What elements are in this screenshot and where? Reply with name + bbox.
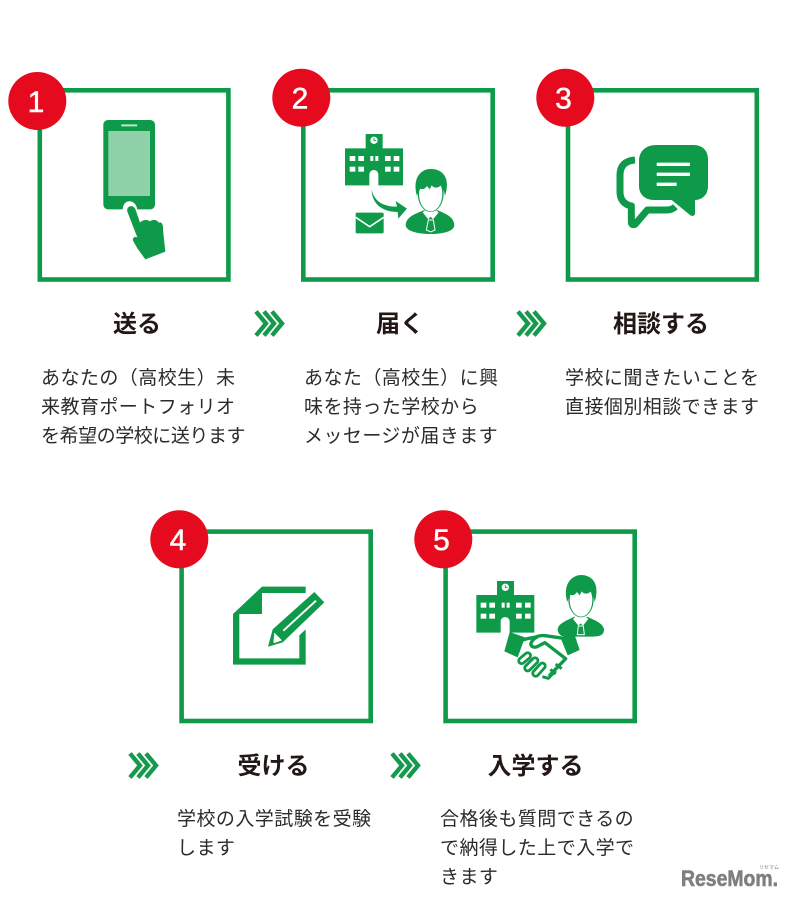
text: step 2 description: 味を持った学校から bbox=[304, 396, 479, 418]
student bbox=[558, 575, 604, 637]
number badge 2: 2 bbox=[292, 82, 308, 116]
frame 1 bbox=[40, 90, 228, 280]
icon: school, student and handshake bbox=[476, 575, 604, 678]
frame 3 bbox=[568, 90, 757, 280]
number badge 4 bbox=[150, 510, 208, 568]
heading: step 4: 受ける bbox=[238, 753, 310, 780]
logo: ReseMom watermark: リセマム bbox=[759, 865, 779, 871]
number badge 5: 5 bbox=[433, 524, 450, 557]
icon: document and pencil bbox=[233, 587, 324, 665]
icon: speech bubbles bbox=[620, 145, 708, 225]
text: step 4 description bbox=[177, 808, 372, 859]
panel: step 2 receive bbox=[272, 69, 493, 280]
frame 2 bbox=[303, 90, 493, 280]
heading: step 1: 送る bbox=[113, 311, 161, 338]
arrow: step 1 to 2 bbox=[256, 312, 282, 336]
text: step 1 description bbox=[41, 367, 245, 447]
text: step 3 description: 直接個別相談できます bbox=[565, 396, 760, 418]
panel: step 1 send bbox=[8, 72, 228, 280]
number badge 5 bbox=[414, 510, 472, 568]
student bbox=[406, 169, 454, 234]
heading: step 3: 相談する bbox=[613, 311, 709, 338]
text: step 1 description: 来教育ポートフォリオ bbox=[41, 396, 236, 418]
panel: step 5 enrol bbox=[414, 510, 635, 721]
text: step 5 description: で納得した上で入学で bbox=[440, 837, 635, 859]
icon: school, mail and student bbox=[345, 134, 454, 234]
icon: phone with tapping finger bbox=[103, 120, 165, 259]
text: step 1 description: を希望の学校に送ります bbox=[41, 425, 245, 447]
number badge 1 bbox=[8, 72, 66, 130]
heading: step 2: 届く bbox=[376, 311, 424, 338]
text: step 3 description bbox=[565, 367, 760, 418]
number badge 3: 3 bbox=[555, 82, 572, 116]
text: step 2 description bbox=[304, 367, 499, 447]
arrow: step 2 to 3 bbox=[518, 312, 544, 336]
frame 5 bbox=[446, 532, 635, 721]
panel: step 3 consult bbox=[536, 69, 757, 280]
text: step 5 description: きます bbox=[440, 867, 498, 888]
frame 4 bbox=[182, 532, 371, 721]
envelope bbox=[356, 213, 384, 233]
text: step 4 description: します bbox=[177, 838, 235, 859]
logo: ReseMom watermark: ReseMom. bbox=[681, 866, 778, 891]
handshake bbox=[504, 632, 580, 678]
text: step 5 description: 合格後も質問できるの bbox=[440, 808, 634, 830]
arrow: step 4 to 5 bbox=[392, 754, 418, 778]
text: step 4 description: 学校の入学試験を受験 bbox=[177, 808, 372, 830]
panel: step 4 exam bbox=[150, 510, 371, 721]
arrow bbox=[372, 189, 407, 219]
text: step 2 description: メッセージが届きます bbox=[304, 425, 498, 447]
school bbox=[476, 581, 534, 633]
number badge 3 bbox=[536, 69, 594, 127]
number badge 4: 4 bbox=[170, 524, 186, 557]
text: step 5 description bbox=[440, 808, 635, 888]
heading: step 5: 入学する bbox=[488, 753, 584, 780]
text: step 1 description: あなたの（高校生）未 bbox=[41, 367, 236, 389]
number badge 2 bbox=[272, 69, 330, 127]
school bbox=[345, 134, 403, 185]
number badge 1: 1 bbox=[28, 86, 44, 119]
text: step 2 description: あなた（高校生）に興 bbox=[304, 367, 499, 389]
text: step 3 description: 学校に聞きたいことを bbox=[565, 367, 760, 389]
arrow: step 3 to 4 bbox=[130, 754, 156, 778]
